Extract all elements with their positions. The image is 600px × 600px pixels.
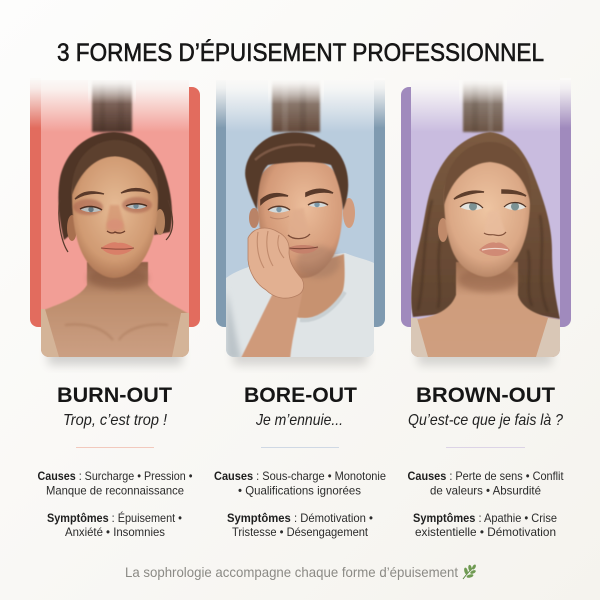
woman: long hair (411, 132, 560, 319)
divider: brown-out (446, 447, 525, 448)
heading: burn-out: BURN-OUT (57, 384, 172, 407)
man: face (257, 158, 343, 278)
woman: nose (106, 205, 125, 234)
panel: burn-out portrait (30, 78, 200, 365)
symptoms: burn-out: Symptômes : Épuisement • (47, 510, 182, 525)
woman: ears (67, 209, 165, 241)
woman: ear (438, 218, 448, 242)
column: bore-out text (214, 384, 386, 539)
heading: brown-out: BROWN-OUT (416, 384, 555, 407)
panel: brown-out portrait (401, 78, 571, 365)
woman: hair behind (58, 132, 172, 240)
woman: hair front (72, 140, 158, 195)
symptoms: brown-out: Symptômes : Apathie • Crise (413, 511, 557, 525)
hair streak bar (88, 78, 136, 132)
woman: lips (479, 242, 510, 256)
man: lips (288, 245, 318, 254)
man: forearm and hand (240, 228, 304, 360)
woman: face (444, 160, 530, 277)
man: hair (245, 132, 348, 210)
woman: nose (484, 228, 506, 236)
man: neck (296, 254, 346, 318)
woman: lips (101, 242, 134, 255)
causes: bore-out: Causes : Sous-charge • Monotonie (214, 469, 386, 483)
column: brown-out text (408, 384, 564, 539)
divider: bore-out (261, 447, 339, 448)
causes: burn-out: Manque de reconnaissance (46, 484, 184, 498)
hair streak bar (462, 82, 504, 134)
column: burn-out text (38, 384, 192, 539)
man: t-shirt (226, 253, 374, 360)
symptoms: burn-out: Anxiété • Insomnies (65, 525, 165, 539)
woman: eyes and brows (73, 188, 152, 215)
causes: burn-out (38, 469, 192, 498)
symptoms: bore-out: Tristesse • Désengagement (232, 525, 369, 539)
symptoms: burn-out (47, 510, 182, 539)
causes: brown-out: de valeurs • Absurdité (430, 484, 541, 498)
woman: chest and neck (41, 262, 189, 360)
causes: bore-out: • Qualifications ignorées (238, 484, 361, 498)
divider: burn-out (76, 447, 154, 448)
heading: bore-out: BORE-OUT (244, 384, 357, 407)
woman: face (72, 156, 158, 278)
woman: chest and neck (411, 262, 560, 360)
causes: burn-out: Causes : Surcharge • Pression • (38, 469, 192, 483)
panel: bore-out portrait (216, 78, 385, 365)
title: 3 FORMES D’ÉPUISEMENT PROFESSIONNEL (57, 38, 544, 67)
symptoms: brown-out (413, 511, 557, 539)
icon: leaf sprig (463, 564, 477, 579)
tagline: burn-out: Trop, c’est trop ! (63, 412, 168, 429)
man: nose (288, 208, 310, 239)
hair streak bar (270, 82, 322, 134)
symptoms: bore-out: Symptômes : Démotivation • (227, 511, 373, 525)
woman: hair front (444, 142, 531, 205)
causes: bore-out (214, 469, 386, 498)
causes: brown-out: Causes : Perte de sens • Conflit (408, 469, 564, 483)
tagline: bore-out: Je m’ennuie... (255, 412, 343, 429)
woman: eyes and brows (454, 190, 526, 210)
symptoms: bore-out (227, 511, 373, 539)
tagline: brown-out: Qu’est-ce que je fais là ? (408, 412, 563, 429)
causes: brown-out (408, 469, 564, 498)
man: eyes and brows (261, 189, 333, 219)
man: ears (249, 198, 355, 228)
symptoms: brown-out: existentielle • Démotivation (415, 525, 556, 539)
footer note: La sophrologie accompagne chaque forme d’épuisement (125, 564, 458, 580)
